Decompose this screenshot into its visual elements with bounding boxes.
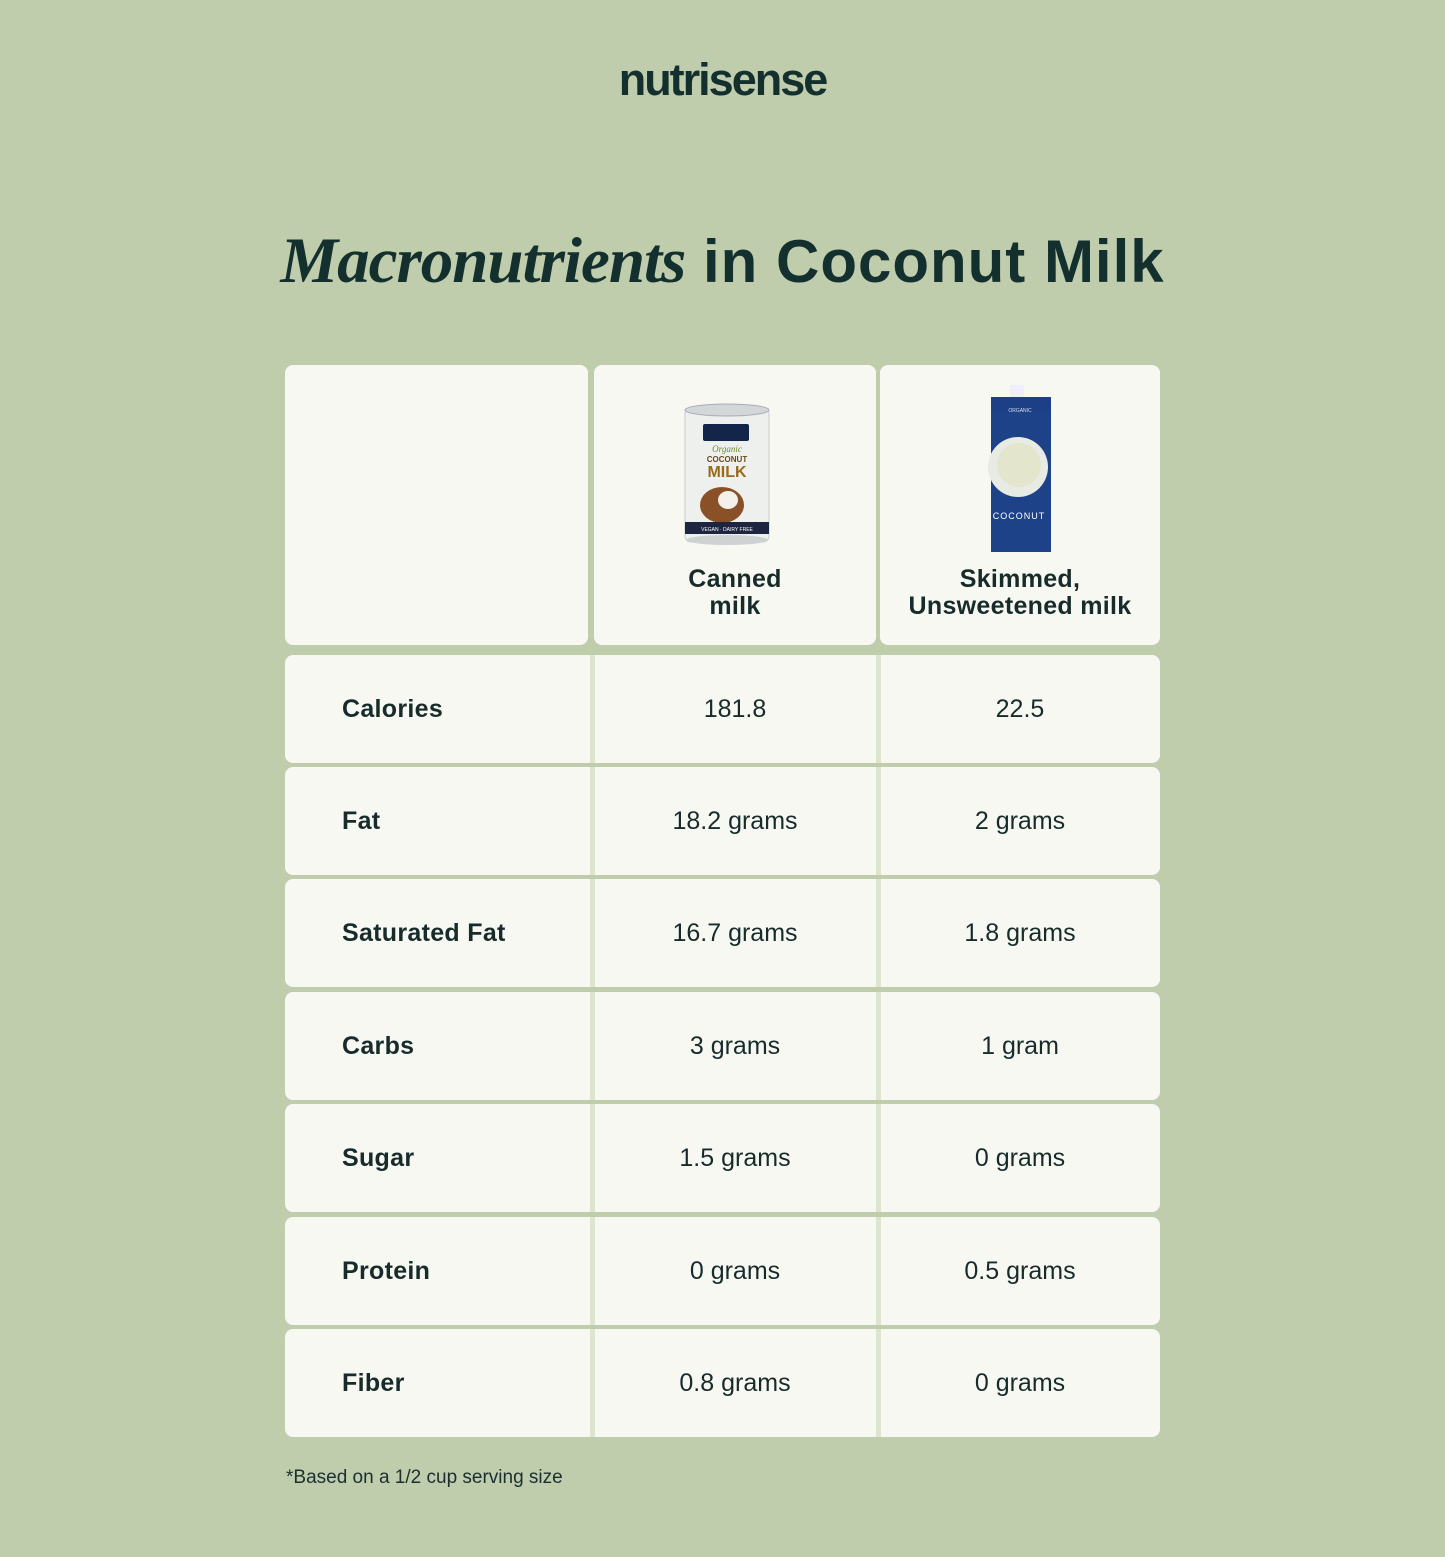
header cell: empty	[285, 365, 588, 645]
label: canned milk: milk	[709, 592, 761, 620]
row: fiber: 0.8 grams	[679, 1369, 791, 1397]
header cell: skimmed milk	[880, 365, 1160, 645]
icon: coconut milk can: COCONUT	[707, 455, 747, 464]
row: calories: 181.8	[704, 695, 766, 723]
row: protein: Protein	[342, 1257, 430, 1285]
header cell: canned milk	[594, 365, 876, 645]
row: saturated fat: Saturated Fat	[342, 919, 506, 947]
label: skimmed milk: Skimmed,	[960, 565, 1080, 593]
icon: coconut milk carton: COCONUT	[993, 511, 1045, 521]
row: carbs: Carbs	[342, 1032, 414, 1060]
title: Macronutrients in Coconut Milk	[280, 225, 1165, 297]
label: skimmed milk	[909, 565, 1132, 620]
row: sugar: Sugar	[342, 1144, 414, 1172]
label: skimmed milk: Unsweetened milk	[909, 592, 1131, 620]
icon: coconut milk can: Organic	[712, 444, 742, 454]
row: carbs: 1 gram	[981, 1032, 1059, 1060]
row: carbs: 3 grams	[690, 1032, 780, 1060]
row: fiber	[285, 1329, 1160, 1437]
row: saturated fat: 16.7 grams	[672, 919, 798, 947]
icon: coconut milk can	[684, 404, 770, 545]
row: fiber: 0 grams	[975, 1369, 1065, 1397]
row: protein	[285, 1217, 1160, 1325]
logo: nutrisense	[619, 54, 826, 105]
row: protein: 0 grams	[690, 1257, 780, 1285]
row: calories: 22.5	[996, 695, 1044, 723]
row: carbs	[285, 992, 1160, 1100]
icon: coconut milk carton: ORGANIC	[1008, 408, 1032, 414]
icon: coconut milk can: VEGAN · DAIRY FREE	[701, 527, 754, 533]
footnote: *Based on a 1/2 cup serving size	[286, 1467, 563, 1488]
row: fat: 2 grams	[975, 807, 1065, 835]
row: sugar	[285, 1104, 1160, 1212]
row: fiber: Fiber	[342, 1369, 405, 1397]
row: sugar: 1.5 grams	[679, 1144, 791, 1172]
row: calories: Calories	[342, 695, 443, 723]
row: fat: 18.2 grams	[672, 807, 798, 835]
label: canned milk: Canned	[688, 565, 782, 593]
row: sugar: 0 grams	[975, 1144, 1065, 1172]
label: canned milk	[688, 565, 782, 620]
row: saturated fat	[285, 879, 1160, 987]
row: calories	[285, 655, 1160, 763]
icon: coconut milk can: MILK	[707, 464, 747, 481]
row: fat: Fat	[342, 807, 380, 835]
row: saturated fat: 1.8 grams	[964, 919, 1076, 947]
row: protein: 0.5 grams	[964, 1257, 1076, 1285]
icon: coconut milk carton	[988, 385, 1051, 552]
row: fat	[285, 767, 1160, 875]
